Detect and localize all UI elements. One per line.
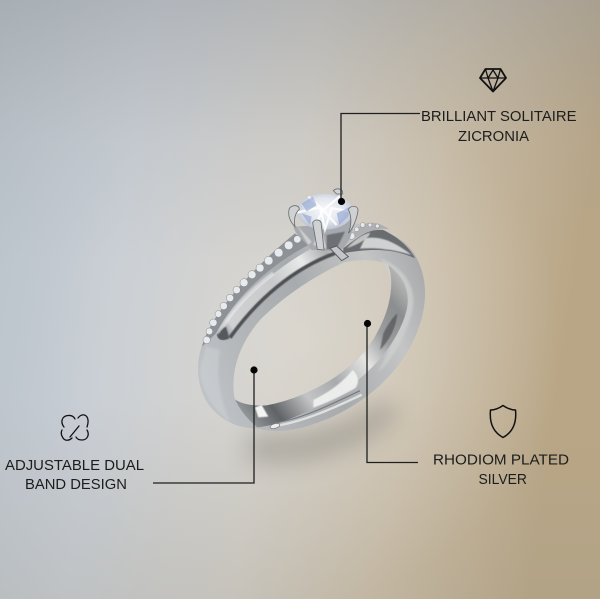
inner band bright reflection [313, 370, 358, 407]
heading: brilliant solitaire zicronia: ZICRONIA [458, 129, 529, 145]
top surface dark groove [230, 253, 335, 338]
pave stone strip [202, 223, 389, 347]
heading: adjustable dual band design [5, 458, 144, 493]
callout line: rhodium plating [364, 320, 418, 462]
polished top surface [217, 248, 330, 340]
prongs [289, 189, 358, 250]
setting head [289, 189, 358, 261]
heading: adjustable dual band design: BAND DESIGN [25, 477, 127, 493]
heading: rhodiom plated silver: SILVER [478, 472, 527, 488]
callout line: adjustable band [153, 366, 258, 483]
base claw [330, 246, 348, 261]
right top surface [343, 230, 415, 258]
icon: interlocking loops [61, 415, 88, 440]
heading: adjustable dual band design: ADJUSTABLE DUAL [5, 458, 144, 474]
heading: brilliant solitaire zicronia [421, 109, 577, 145]
heading: brilliant solitaire zicronia: BRILLIANT SOLITAIRE [421, 109, 577, 125]
inner back band surface [235, 265, 408, 427]
heading: rhodiom plated silver [433, 452, 569, 488]
lower band edge and slot [270, 395, 362, 427]
band front face shading [200, 347, 230, 422]
ring shadow [245, 400, 400, 464]
ring photo [198, 189, 425, 431]
diamond [297, 194, 353, 230]
icon: diamond [480, 69, 506, 92]
icon: shield [490, 406, 516, 438]
heading: rhodiom plated silver: RHODIOM PLATED [433, 452, 569, 468]
callout line: solitaire [338, 114, 420, 205]
ring band silhouette [198, 223, 425, 431]
